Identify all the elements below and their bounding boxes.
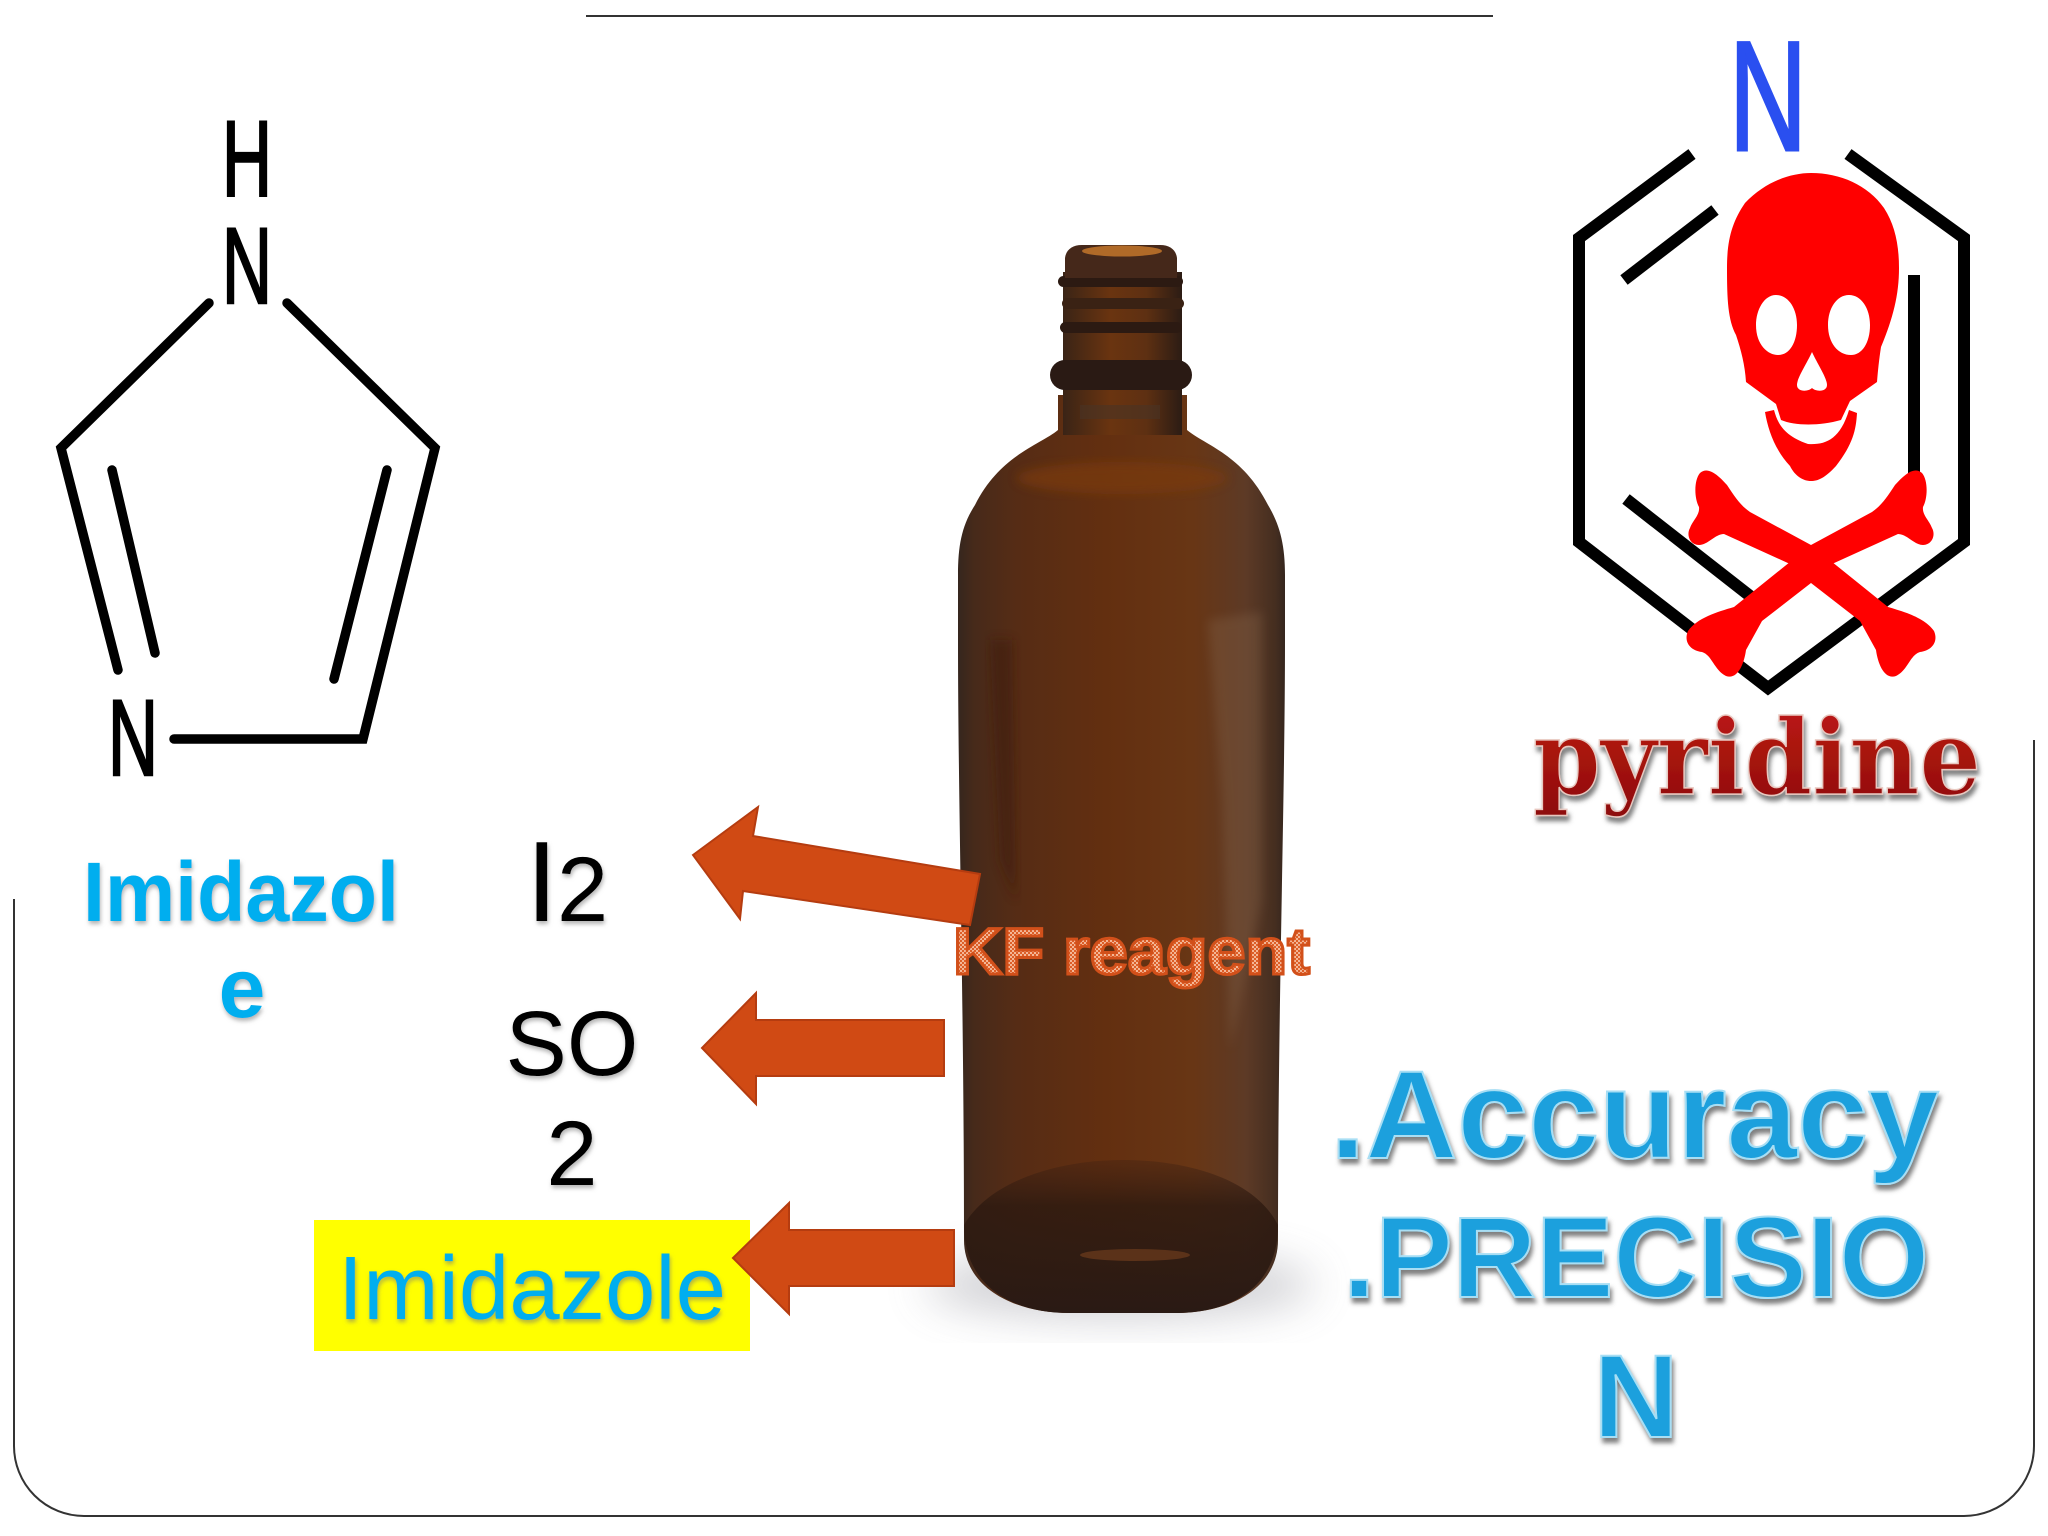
imidazole text: Imidazole <box>338 1239 726 1339</box>
jaw <box>1765 410 1857 481</box>
bottle body <box>958 395 1285 1313</box>
arrow: to imidazole <box>733 1203 954 1314</box>
accuracy and precision text: .Accuracy <box>1330 1046 1939 1185</box>
top rule <box>586 15 1493 17</box>
skull and crossbones icon <box>1687 173 1935 677</box>
imidazole caption: Imidazol <box>83 845 399 939</box>
atom labels: N <box>222 205 272 326</box>
I2 label <box>526 819 608 946</box>
SO2 label <box>506 993 638 1205</box>
ring bonds <box>61 303 435 739</box>
pyridine structure <box>1579 10 1964 688</box>
left reflection <box>994 642 1014 879</box>
SO2 label: SO <box>506 993 638 1095</box>
yellow highlight <box>314 1220 750 1351</box>
bottle neck <box>1050 245 1192 435</box>
nitrogen label: N <box>1729 10 1807 184</box>
bottle photo <box>925 245 1315 1317</box>
atom labels <box>108 98 272 798</box>
I2 label: I <box>526 819 558 946</box>
right reflection <box>1208 612 1262 1050</box>
atom labels: H <box>222 98 272 219</box>
ring bonds <box>1579 154 1964 688</box>
KF reagent label: KF reagent <box>953 914 1310 988</box>
accuracy and precision text <box>1330 1046 1939 1463</box>
I2 label: 2 <box>557 839 608 941</box>
imidazole caption <box>83 845 399 1035</box>
rounded border <box>14 740 2034 1516</box>
accuracy and precision text: .PRECISIO <box>1343 1194 1929 1322</box>
imidazole highlighted label <box>314 1220 750 1351</box>
base highlight <box>1080 1249 1190 1261</box>
crossbones <box>1687 471 1935 677</box>
bottle base <box>964 1160 1278 1313</box>
arrow: to I2 <box>693 807 980 925</box>
imidazole caption: e <box>219 941 265 1035</box>
accuracy and precision text: N <box>1593 1331 1679 1463</box>
shoulder glow <box>1017 462 1227 494</box>
cranium <box>1727 173 1899 424</box>
bottle shadow <box>925 1253 1315 1317</box>
pyridine label: pyridine <box>1533 696 1981 819</box>
SO2 label: 2 <box>546 1103 598 1205</box>
arrow: to SO2 <box>702 993 944 1104</box>
atom labels: N <box>108 677 158 798</box>
imidazole structure <box>61 98 435 798</box>
